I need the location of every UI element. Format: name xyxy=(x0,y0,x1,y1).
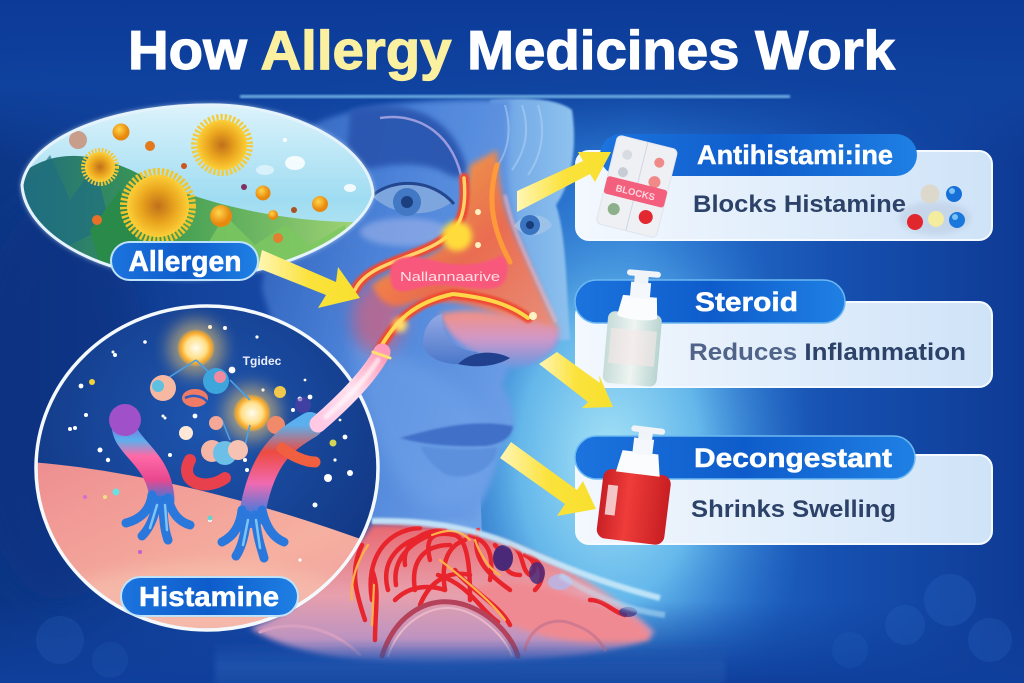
icon: steroid bottle xyxy=(602,268,666,387)
icon: blister pack xyxy=(596,135,678,238)
tissue base xyxy=(250,524,655,664)
heading pill xyxy=(575,436,915,479)
loop arcs xyxy=(260,602,605,656)
cheek light xyxy=(350,340,495,510)
card xyxy=(576,151,992,240)
heading: Antihistami:ine xyxy=(697,140,893,170)
panel: antihistamine xyxy=(576,134,992,240)
panel: steroid xyxy=(575,268,992,387)
label: Allergen: Allergen xyxy=(128,246,242,278)
icon: blister pack: BLOCKS xyxy=(614,183,656,203)
divider under title xyxy=(240,95,790,98)
face illustration xyxy=(262,98,574,532)
card xyxy=(576,455,992,544)
label: Allergen xyxy=(111,242,258,280)
head silhouette xyxy=(262,100,557,522)
icon: decongestant bottle xyxy=(596,422,677,546)
panel: decongestant xyxy=(575,422,992,546)
pink right mass xyxy=(470,582,650,644)
forehead wrinkles xyxy=(498,105,542,175)
title: How Allergy Medicines Work xyxy=(128,19,895,81)
coloured particles xyxy=(83,379,336,554)
inflamed nose ridge xyxy=(372,150,558,333)
red strands xyxy=(355,528,625,640)
arrow: to steroid xyxy=(539,352,613,408)
heading: Decongestant xyxy=(694,443,892,473)
description: Reduces Inflammation xyxy=(689,339,966,366)
heading pill xyxy=(600,134,917,176)
description: Shrinks Swelling xyxy=(691,496,896,523)
arrow: to antihistamine xyxy=(517,152,611,212)
pale vein arc xyxy=(380,117,463,185)
arrow: to decongestant xyxy=(500,442,596,516)
small garbled label: Tgidec xyxy=(243,354,282,368)
particles xyxy=(68,325,353,562)
label: Histamine xyxy=(121,577,298,616)
label: inflamed nasal tissue xyxy=(390,256,508,291)
nerve branches xyxy=(355,165,537,352)
icon: loose pills xyxy=(899,184,971,235)
description: Blocks Histamine xyxy=(693,191,906,218)
orange highlights xyxy=(352,531,505,625)
collar band xyxy=(372,521,660,598)
panel: histamine circle xyxy=(30,306,385,640)
far side of face xyxy=(490,98,574,340)
meadow xyxy=(24,156,354,268)
bottom fade xyxy=(215,640,725,683)
nose tip xyxy=(440,311,558,366)
under-eye light xyxy=(360,218,450,246)
anatomy tissue at neck xyxy=(215,521,725,683)
near eye xyxy=(372,183,454,216)
cell surface xyxy=(38,462,359,628)
label: Histamine: Histamine xyxy=(139,581,279,612)
nose wing and nostril xyxy=(423,314,510,366)
lips xyxy=(400,423,513,476)
histamine molecules xyxy=(150,320,285,484)
inflamed skin glow beside nose xyxy=(352,282,404,354)
heading: Steroid xyxy=(695,287,798,317)
pollen dots xyxy=(69,124,356,243)
card xyxy=(576,302,992,387)
purple vessels xyxy=(493,545,513,571)
panel: allergen oval xyxy=(15,100,380,285)
neck xyxy=(372,490,482,532)
tube linking nose to histamine receptor xyxy=(318,352,390,424)
heading pill xyxy=(575,280,845,323)
label: inflamed nasal tissue: Nallannaarive xyxy=(400,270,500,284)
dark socket above eye xyxy=(345,106,466,177)
pale nose ridge xyxy=(505,195,556,322)
far eye xyxy=(514,215,552,235)
dandelions xyxy=(85,120,247,237)
arrow: allergen to nose xyxy=(258,250,360,308)
histamine receptors xyxy=(109,404,315,558)
